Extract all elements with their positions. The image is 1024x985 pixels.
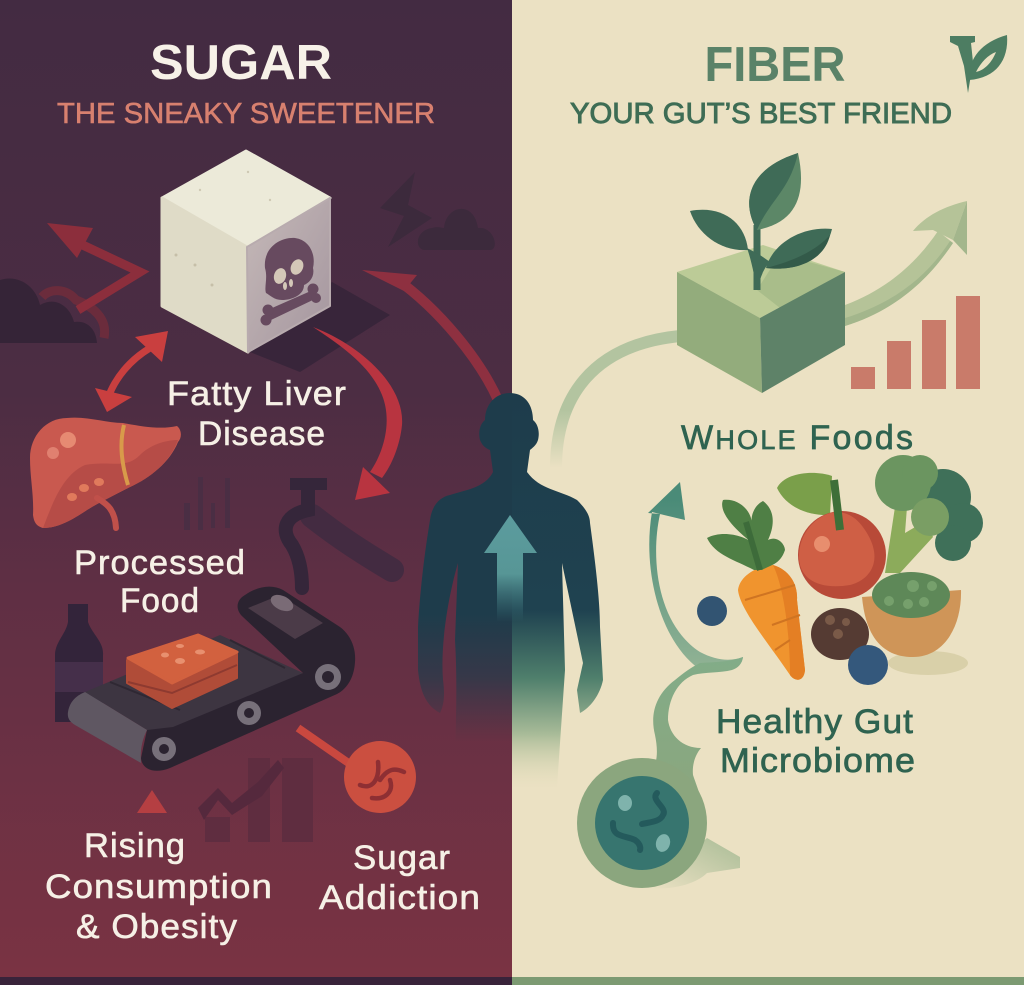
label: healthy gut microbiome	[716, 703, 916, 780]
icon: bowl of greens	[862, 572, 968, 675]
title: fiber: FIBER	[704, 38, 846, 92]
label: rising consumption and obesity: Rising	[84, 827, 186, 865]
subtitle: the sneaky sweetener: THE SNEAKY SWEETENER	[57, 98, 435, 130]
arrow: curved red to tap	[313, 327, 402, 500]
icon: gut microbiome circle	[577, 657, 743, 888]
label: processed food: Processed	[74, 544, 246, 582]
shadow: cube	[250, 282, 390, 372]
icon: leaf	[777, 473, 832, 515]
label: sugar addiction: Addiction	[319, 879, 481, 917]
icon: connector to addiction	[298, 728, 350, 764]
icon: dark cloud left	[0, 278, 97, 343]
icon: dark tap	[286, 478, 392, 588]
icon: blueberry two	[848, 645, 888, 685]
icon: fiber leaf logo	[950, 35, 1007, 93]
label: fatty liver disease: Fatty Liver	[167, 375, 347, 413]
panel: fiber background	[512, 0, 1024, 977]
icon: skull and crossbones	[260, 238, 321, 326]
label: healthy gut microbiome: Healthy Gut	[716, 703, 914, 741]
icon: broccoli	[875, 455, 983, 573]
icon: small triangle	[137, 790, 167, 813]
label: processed food	[74, 544, 246, 620]
label: whole foods: WHOLE Foods	[681, 419, 913, 457]
arrow: upward in torso	[484, 515, 537, 622]
icon: green cube with plant	[677, 153, 845, 393]
label: sugar addiction	[319, 839, 481, 917]
icon: conveyor belt with food	[68, 587, 355, 771]
arrow: person to cube	[362, 270, 498, 400]
arrow: fiber growth curve	[845, 201, 967, 326]
label: rising consumption and obesity: Consumption	[45, 868, 273, 906]
icon: bottle	[55, 604, 103, 722]
icon: rising chart dark	[198, 758, 313, 842]
bar chart: fiber growth	[851, 296, 980, 389]
icon: faded bar chart	[184, 477, 230, 530]
footer strip: fiber side	[512, 977, 1024, 985]
label: processed food: Food	[120, 582, 200, 620]
icon: round dark fruit	[811, 608, 869, 660]
icon: plant leaves	[690, 153, 832, 290]
label: fatty liver disease	[167, 375, 347, 453]
label: rising consumption and obesity: & Obesity	[76, 908, 238, 946]
icon: food group	[697, 455, 983, 685]
icon: addiction circle	[344, 741, 416, 813]
arrow: double arrow cube to liver	[95, 331, 168, 412]
title: sugar: SUGAR	[150, 36, 332, 90]
label: fatty liver disease: Disease	[198, 415, 326, 453]
icon: sugar cube with skull	[162, 151, 330, 352]
person silhouette	[418, 393, 603, 787]
label: healthy gut microbiome: Microbiome	[720, 742, 916, 780]
icon: apple	[798, 480, 886, 599]
label: rising consumption and obesity	[45, 827, 273, 946]
arrow: green up to foods	[648, 482, 743, 671]
label: sugar addiction: Sugar	[353, 839, 451, 877]
icon: carrot	[707, 500, 805, 680]
arrow: zigzag red	[42, 223, 140, 338]
icon: blueberry	[697, 596, 727, 626]
icon: lightning bolt and cloud	[380, 172, 495, 250]
footer strip: sugar side	[0, 977, 512, 985]
arrow: fiber arc to cube	[556, 336, 680, 468]
subtitle: your gut's best friend: YOUR GUT’S BEST FRIEND	[570, 98, 952, 130]
panel: sugar background	[0, 0, 512, 977]
icon: liver	[30, 418, 181, 528]
